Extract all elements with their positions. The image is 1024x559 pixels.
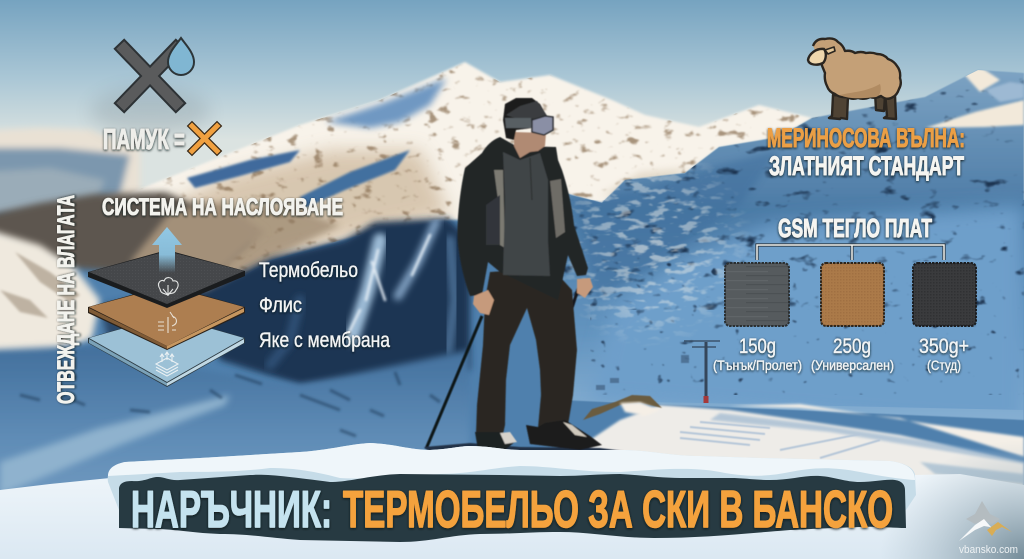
- sunlit main massif: [100, 62, 812, 300]
- use: (Студ): [927, 357, 961, 373]
- layer: shell: [88, 315, 245, 387]
- texture on right range: [563, 70, 1024, 410]
- trousers: [476, 268, 577, 434]
- label: base layer: Термобельо: [259, 259, 358, 282]
- label: shell: Яке с мембрана: [259, 329, 390, 352]
- cotton label: ПАМУК =: [103, 124, 185, 156]
- bracket connector: [757, 245, 944, 260]
- swatch 250g: [811, 263, 894, 373]
- icon: merino sheep: [808, 38, 901, 119]
- layer: base: [88, 227, 245, 308]
- soft dark halo behind left icon: [90, 87, 210, 137]
- title text: part one: НАРЪЧНИК:: [131, 481, 332, 539]
- blue right range: [560, 70, 1024, 420]
- use: (Универсален): [811, 357, 894, 373]
- logo: vbansko: [959, 501, 1018, 556]
- goggles: [505, 118, 532, 128]
- layer labels: [259, 259, 390, 352]
- layer: fleece: [88, 285, 245, 350]
- heading: GSM fabric weight: GSM ТЕГЛО ПЛАТ: [778, 213, 932, 243]
- corner vignette: [880, 440, 1024, 559]
- rock outcrop: [583, 395, 662, 420]
- swatch 350g+: [913, 263, 976, 373]
- layer stack diagram: [88, 227, 245, 387]
- snow cap shadow: [108, 443, 916, 510]
- dark banner: [119, 474, 906, 542]
- grey jacket panels: [494, 170, 505, 248]
- sheep legs: [829, 92, 896, 119]
- rock texture on the massif: [141, 64, 800, 294]
- dark shaded face: [192, 218, 470, 385]
- sheep muzzle: [808, 49, 826, 65]
- sunlit piste: [575, 405, 1024, 490]
- skier with ski poles: [424, 98, 680, 460]
- hands: [473, 290, 494, 315]
- snow streaks in the shaded face: [270, 222, 455, 365]
- icon: fleece fibres: [158, 312, 176, 333]
- left pole: [426, 316, 482, 449]
- icon: water drop: [168, 38, 194, 75]
- jacket: [457, 137, 588, 300]
- weight: 250g: [833, 335, 871, 358]
- icon: crossed cotton with water drop: [124, 38, 194, 103]
- heading: layering system: СИСТЕМА НА НАСЛОЯВАНЕ: [102, 194, 343, 221]
- weight: 350g+: [919, 335, 969, 358]
- icon: membrane: [156, 352, 178, 376]
- title banner with snow cap: [108, 443, 916, 542]
- lower snow slope: [0, 345, 470, 500]
- neck and face: [514, 132, 546, 158]
- vertical label: moisture wicking: ОТВЕЖДАНЕ НА ВЛАГАТА: [53, 195, 80, 404]
- base layer: [503, 152, 550, 276]
- foreground snow: [0, 474, 1024, 559]
- weight: 150g: [739, 335, 776, 358]
- lit snow shoulder, far left: [0, 230, 100, 358]
- distant pale ridge, left: [0, 128, 140, 215]
- lift tower: [596, 341, 720, 403]
- sheep body: [813, 38, 901, 99]
- right pole: [571, 283, 580, 311]
- arrow up: [152, 227, 182, 273]
- logo text: vbansko.com: [959, 544, 1018, 556]
- label: fleece: Флис: [259, 294, 302, 317]
- boots: [475, 432, 516, 450]
- skis: [424, 443, 680, 460]
- brown left ridge: [0, 192, 250, 290]
- icon: cotton boll: [159, 278, 178, 296]
- sheep belly shade: [840, 84, 881, 98]
- sheep ear: [825, 47, 835, 54]
- hair and headband: [503, 98, 548, 140]
- shadow behind the layer stack: [100, 288, 230, 362]
- swatch 150g: [713, 263, 802, 373]
- use: (Тънък/Пролет): [713, 357, 802, 373]
- icon: orange cross: [192, 126, 217, 151]
- snow cap top: [108, 443, 915, 480]
